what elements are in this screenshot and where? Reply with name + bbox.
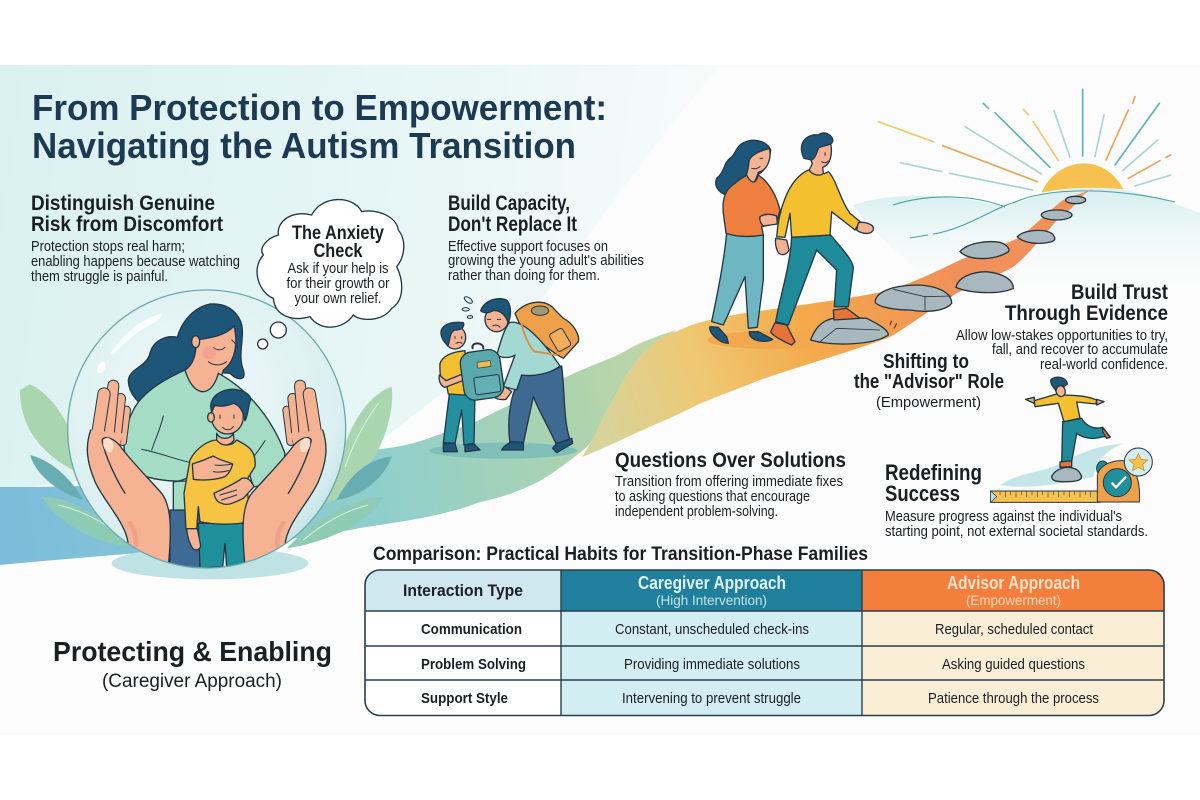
text block: distinguish genuine risk (31, 192, 240, 285)
text block: build capacity: rather than doing for them. (448, 267, 600, 284)
text block: questions over solutions: independent problem-solving. (615, 503, 778, 520)
text block: shifting to the advisor role: Shifting to (883, 351, 969, 373)
text block: distinguish genuine risk: Risk from Discomfort (31, 213, 223, 236)
text block: build capacity: Build Capacity, (448, 192, 570, 215)
table row: support style: Intervening to prevent struggle (622, 690, 801, 707)
text block: shifting to the advisor role: (Empowerment) (876, 394, 981, 411)
orange pathway to the sun (582, 189, 1093, 457)
table row: problem solving: Providing immediate solutions (624, 656, 800, 673)
table header row: Advisor Approach (947, 573, 1080, 593)
right cupped hand (243, 386, 326, 567)
left cupped hand (87, 386, 170, 567)
shadow under walkers (707, 331, 843, 349)
title: Navigating the Autism Transition (32, 125, 576, 166)
table header row: Interaction Type (403, 581, 523, 600)
callout: the anxiety check thought cloud: Check (314, 241, 363, 262)
text block: build trust through evidence: Through Evidence (1005, 302, 1168, 325)
table header row (403, 573, 1080, 608)
table row: support style (421, 690, 1099, 707)
table row: problem solving (421, 656, 1085, 673)
table row: support style: Support Style (421, 690, 508, 707)
callout: the anxiety check thought cloud: your own relief. (294, 290, 382, 307)
teal backpack (459, 343, 505, 402)
text block: redefining success: Success (885, 481, 960, 506)
table header row: Caregiver Approach (638, 573, 786, 593)
callout: the anxiety check thought cloud: Ask if your help is (288, 260, 388, 277)
text block: build trust through evidence: Allow low-stakes opportunities to try, (956, 327, 1168, 344)
text block: redefining success: starting point, not external societal standards. (885, 523, 1148, 540)
callout: the anxiety check thought cloud: The Anxiety (292, 223, 384, 244)
text block: build trust through evidence (956, 281, 1168, 373)
table row: communication: Regular, scheduled contact (935, 621, 1094, 638)
illustration: advisor walking beside young adult (710, 133, 873, 345)
table row: communication: Constant, unscheduled check-ins (615, 621, 809, 638)
text block: distinguish genuine risk: them struggle is painful. (31, 268, 168, 285)
table row: communication: Communication (421, 621, 522, 638)
text block: build trust through evidence: fall, and recover to accumulate (992, 341, 1168, 358)
title: From Protection to Empowerment: (32, 87, 607, 128)
table row: problem solving: Problem Solving (421, 656, 526, 673)
title (32, 87, 607, 166)
text block: protecting and enabling: Protecting & Enabling (53, 636, 332, 667)
child holding backpack (439, 322, 480, 452)
young man stepping (771, 133, 873, 345)
flowing journey band (0, 330, 677, 565)
hills on the horizon (853, 188, 1200, 300)
illustration: parent and child protected in a bubble (68, 290, 346, 568)
table row: communication (421, 621, 1094, 638)
text block: distinguish genuine risk: Protection stops real harm; (31, 238, 185, 255)
text block: questions over solutions: Questions Over Solutions (615, 449, 846, 472)
text block: build capacity: Effective support focuses on (448, 238, 608, 255)
text block: build capacity (448, 192, 644, 284)
text block: redefining success: Measure progress against the individual's (885, 508, 1122, 525)
woman walking beside (710, 140, 780, 343)
table header row: (Empowerment) (966, 592, 1061, 608)
child (184, 389, 255, 568)
table header row: (High Intervention) (656, 592, 767, 608)
text block: questions over solutions (615, 449, 846, 520)
text block: build trust through evidence: real-world confidence. (1040, 356, 1168, 373)
table row: support style: Patience through the process (928, 690, 1099, 707)
callout: the anxiety check thought cloud (257, 200, 404, 349)
text block: distinguish genuine risk: enabling happens because watching (31, 253, 240, 270)
mother (124, 304, 285, 568)
callout: the anxiety check thought cloud: for their growth or (286, 275, 390, 292)
text block: distinguish genuine risk: Distinguish Genuine (31, 192, 215, 215)
text block: protecting and enabling (53, 636, 332, 692)
stepping stones (811, 196, 1086, 344)
sweat drops (462, 295, 473, 318)
text block: redefining success (885, 460, 1148, 540)
text block: build capacity: Don't Replace It (448, 213, 577, 236)
icon: measuring tape with star and check (991, 448, 1152, 502)
text block: questions over solutions: Transition from offering immediate fixes (615, 473, 843, 490)
text block: redefining success: Redefining (885, 460, 982, 485)
text block: protecting and enabling: (Caregiver Approach) (102, 671, 282, 692)
illustration: leaves around the bubble (20, 384, 392, 579)
comparison table (365, 570, 1164, 716)
illustration: parent carrying the child's backpack (429, 295, 579, 459)
text block: shifting to the advisor role: the "Advisor" Role (854, 371, 1004, 393)
icon: balancing figure (1000, 377, 1123, 487)
text block: questions over solutions: to asking questions that encourage (615, 488, 810, 505)
text block: build trust through evidence: Build Trust (1071, 281, 1168, 304)
text block: shifting to the advisor role (854, 351, 1004, 411)
table heading: Comparison: Practical Habits for Transition-Phase Families (373, 544, 868, 565)
table row: problem solving: Asking guided questions (942, 656, 1085, 673)
icon: rising sun with rays (878, 89, 1171, 193)
text block: build capacity: growing the young adult's abilities (448, 252, 644, 269)
parent with orange backpack (481, 299, 579, 453)
